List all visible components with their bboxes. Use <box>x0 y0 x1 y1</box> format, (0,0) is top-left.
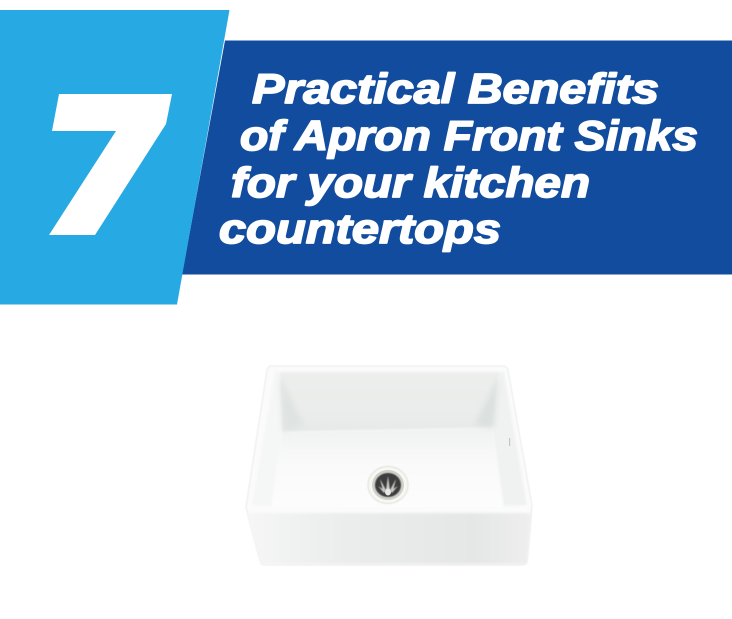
title text: Practical Benefits <box>252 65 659 112</box>
title text: for your kitchen <box>231 159 590 206</box>
drain <box>368 466 408 504</box>
overflow slot <box>509 438 510 446</box>
banner: dark blue title band <box>182 40 732 274</box>
sink front apron <box>247 513 531 564</box>
number 7 <box>49 94 172 235</box>
corner shading left <box>280 376 304 431</box>
sink illustration <box>246 366 532 565</box>
panel: light blue number block <box>0 10 230 304</box>
sink left wall <box>252 371 282 506</box>
title text <box>219 65 698 252</box>
title text: of Apron Front Sinks <box>240 112 698 159</box>
corner shading right <box>474 376 499 428</box>
title text: countertops <box>219 205 501 252</box>
sink back wall <box>279 372 500 432</box>
sink outer body <box>246 366 532 565</box>
sink basin floor <box>272 428 503 506</box>
sink right wall <box>492 372 527 506</box>
